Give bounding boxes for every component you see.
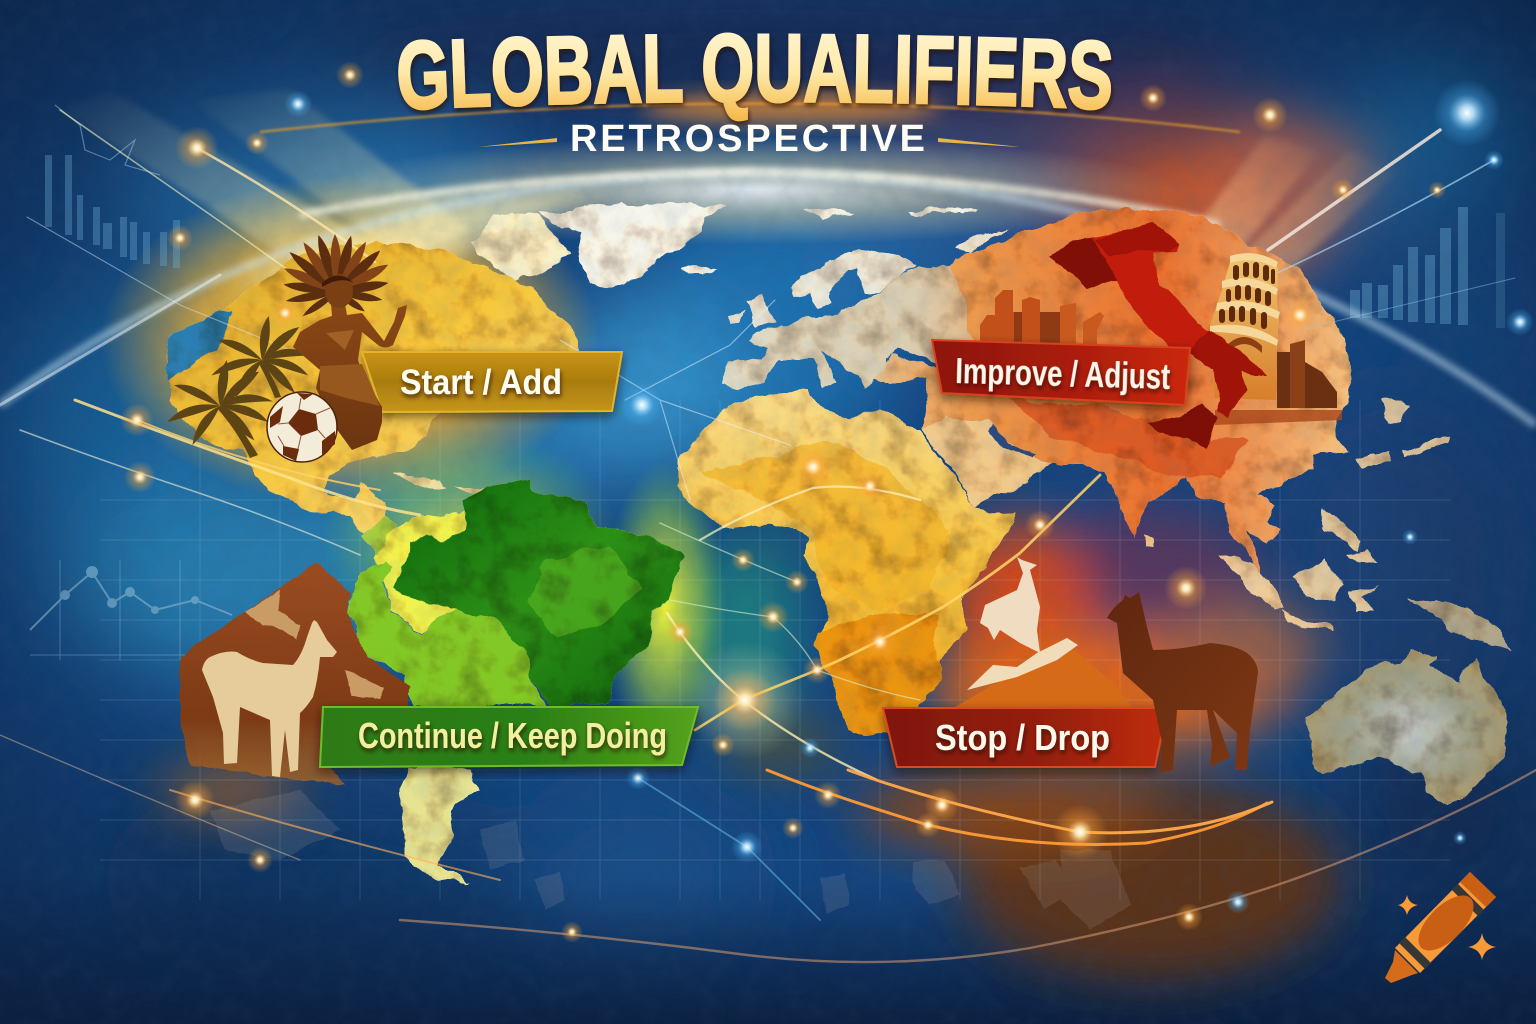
banner: Continue / Keep Doing: [320, 707, 698, 767]
Persian Gulf: [992, 426, 1037, 456]
South America greens: [347, 477, 682, 707]
title block: [396, 32, 1114, 160]
northern South America: [373, 512, 470, 632]
base platform: [1215, 410, 1342, 425]
crayon tip: [1385, 950, 1418, 983]
faint southern landmasses: [210, 790, 1130, 930]
title glow: [640, 94, 940, 122]
Caribbean: [395, 472, 485, 497]
crayon end cap: [1460, 872, 1496, 907]
subtitle rules: [478, 138, 1020, 147]
icon: palm tree right: [211, 316, 313, 398]
left bar chart: [45, 155, 180, 268]
banner: Continue / Keep Doing: Continue / Keep Doing: [358, 715, 667, 756]
Alaska blue inlet: [165, 310, 232, 378]
Australia: [1308, 650, 1510, 807]
Italy map: [1050, 223, 1267, 450]
left chart scribble: [55, 105, 160, 175]
Arabian peninsula: [923, 417, 1050, 505]
brown mountain: [180, 562, 410, 785]
world map continents: [165, 203, 1513, 883]
left city skyline: [980, 290, 1104, 345]
icon: crayon logo: [1385, 872, 1496, 983]
icon: palm tree left: [167, 360, 273, 458]
Europe mainland: [723, 255, 1000, 390]
banner: Improve / Adjust: [932, 340, 1190, 405]
right bar chart: [1350, 207, 1505, 328]
icon: white mountain ridge: [967, 638, 1078, 690]
leaning tower of Pisa: [1210, 253, 1280, 400]
crayon oval label: [1409, 886, 1483, 960]
pale terrain patch: [245, 590, 385, 700]
banner: Stop / Drop: [883, 708, 1167, 767]
North America land: [165, 240, 585, 532]
subtitle: RETROSPECTIVE: [570, 118, 925, 160]
face: [325, 274, 353, 308]
Central America: [363, 518, 395, 555]
globe outline arcs: [0, 104, 1536, 425]
Brazil light central patch: [530, 545, 640, 640]
illustration: African mountain and white llama: [950, 557, 1135, 710]
map grid: [100, 400, 1450, 900]
Novaya Zemlya arc: [957, 230, 1007, 254]
illustration: palms: [167, 316, 313, 458]
main heading: GLOBAL QUALIFIERS: [396, 32, 1114, 127]
sparkles: [1398, 895, 1418, 915]
skirt and top details: [320, 364, 380, 406]
Africa: [675, 390, 1013, 740]
Canadian arctic: [470, 215, 570, 282]
central Asia red patch: [1010, 400, 1250, 480]
icon: dancer: [282, 233, 407, 450]
Africa golden interior: [700, 440, 950, 610]
Greenland: [538, 203, 725, 292]
Japan and Korea islands: [1357, 400, 1450, 468]
icon: white llama: [980, 557, 1040, 653]
body: [293, 304, 407, 450]
banner: Start / Add: Start / Add: [400, 363, 562, 402]
New Guinea: [1407, 597, 1513, 650]
Europe: British Isles: [728, 295, 775, 330]
orange sky wedge and rays: [1100, 110, 1380, 280]
yellow rays on the left: [60, 90, 400, 300]
icon: football: [267, 392, 337, 462]
right city skyline: [1277, 340, 1337, 408]
Andes lime region: [347, 562, 547, 707]
Asia: [877, 207, 1350, 575]
crayon body: [1395, 872, 1496, 973]
Iceland and arctic islands: [683, 209, 977, 277]
Europe: Scandinavia: [790, 250, 915, 308]
illustration: South American mountain and llama: [180, 562, 410, 785]
sparkle lights: [120, 61, 1534, 943]
feather headdress: [282, 233, 391, 319]
Brazil: [395, 477, 682, 707]
Borneo, Sulawesi, Philippines: [1293, 507, 1377, 613]
left line chart: [30, 560, 240, 660]
southern South America: [400, 767, 480, 883]
Sumatra, Java: [1218, 553, 1332, 632]
banner: Start / Add: [362, 352, 622, 412]
icon: pale llama: [202, 620, 337, 777]
orange peak: [950, 640, 1135, 710]
icon: dark llama: [1107, 592, 1258, 772]
southern Africa orange: [817, 613, 940, 740]
faint chart graphics at the edges: [30, 105, 1505, 660]
illustration: Italy with skyline and leaning tower: [980, 223, 1342, 450]
warm and teal ocean zones: [160, 505, 1340, 980]
background glows: [60, 90, 1400, 760]
banner: Stop / Drop: Stop / Drop: [935, 717, 1110, 758]
Sri Lanka: [1145, 532, 1156, 547]
banner: Improve / Adjust: Improve / Adjust: [955, 350, 1171, 397]
